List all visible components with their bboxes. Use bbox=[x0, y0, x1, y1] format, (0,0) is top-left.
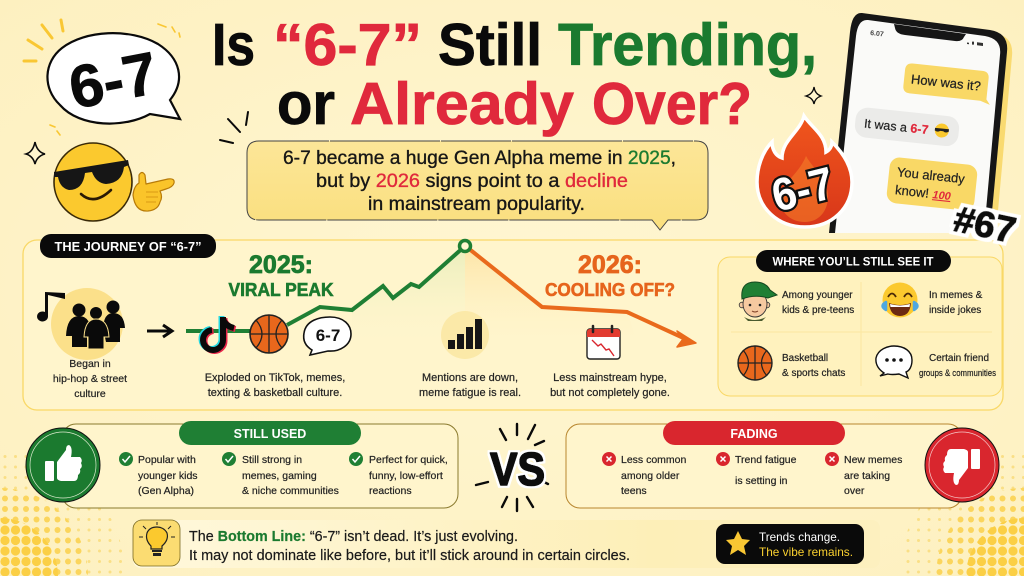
halftone dots bottom left bbox=[0, 455, 122, 576]
peak marker bbox=[460, 240, 470, 252]
chat bubble: how was it bbox=[902, 63, 993, 105]
bottom line text bbox=[189, 529, 630, 564]
text: friend groups bbox=[919, 353, 996, 378]
item: trend fatigue bbox=[716, 452, 797, 487]
icon: sparkle right bbox=[806, 87, 821, 104]
icon: basketball bbox=[250, 315, 288, 353]
caption: exploded bbox=[205, 372, 345, 399]
item: less common: among older bbox=[621, 470, 680, 482]
icon: flame 6-7 sticker: 6-7 bbox=[766, 156, 839, 222]
item: perfect: funny, low-effort bbox=[369, 470, 443, 482]
icon: sparkle left bbox=[26, 142, 45, 164]
icon: 6-7 speech bubble with rays: 6-7 bbox=[64, 39, 163, 122]
item: popular bbox=[119, 452, 198, 497]
item: less common: teens bbox=[621, 485, 647, 497]
heading 2026: 2026: bbox=[578, 251, 642, 279]
icon: thumbs up bbox=[26, 428, 100, 502]
text: basketball: Basketball bbox=[782, 353, 828, 364]
panel: fading bbox=[566, 421, 999, 508]
caption: mentions: Mentions are down, bbox=[422, 372, 518, 384]
icon: boy with cap bbox=[739, 282, 777, 321]
item: new memes: New memes bbox=[844, 454, 902, 466]
item: less common bbox=[602, 452, 687, 497]
item: still strong: memes, gaming bbox=[242, 470, 317, 482]
subtitle callout: 6-7 became a huge Gen Alpha meme in 2025, bbox=[283, 147, 676, 169]
still used pill bbox=[179, 421, 361, 445]
item: popular: Popular with bbox=[138, 454, 196, 466]
badge: trends change bbox=[716, 524, 864, 564]
title: Over? bbox=[592, 71, 752, 137]
chat bubble: it was a 6-7 bbox=[854, 107, 960, 147]
chat bubble: how was it: How was it? bbox=[910, 71, 982, 94]
text: friend groups: groups & communities bbox=[919, 368, 996, 378]
arrow: began to exploded bbox=[147, 325, 172, 337]
icon: flame 6-7 sticker bbox=[757, 116, 852, 227]
caption: began: Began in bbox=[69, 358, 111, 370]
orange falling arrow bbox=[468, 248, 696, 347]
chat bubble: you already know: know! 100 bbox=[894, 182, 952, 203]
item: new memes: over bbox=[844, 485, 865, 497]
VS badge: VS bbox=[490, 443, 545, 495]
text: friend groups: Certain friend bbox=[929, 353, 989, 364]
icon: light bulb bbox=[133, 520, 180, 566]
subtitle callout: in mainstream popularity. bbox=[368, 193, 585, 215]
heading 2025: VIRAL PEAK bbox=[228, 280, 334, 300]
item: new memes bbox=[825, 452, 902, 497]
caption: mentions bbox=[419, 372, 521, 399]
journey panel bbox=[23, 234, 1003, 410]
heading 2025 bbox=[228, 251, 334, 300]
fading pill: FADING bbox=[730, 427, 778, 441]
badge: trends change: Trends change. bbox=[759, 530, 840, 544]
title: Is bbox=[212, 12, 255, 78]
heading pill bbox=[756, 250, 951, 272]
icon: thumbs down bbox=[925, 428, 999, 502]
item: still strong: & niche communities bbox=[242, 485, 339, 497]
fading pill bbox=[663, 421, 845, 445]
icon: chat dots bubble bbox=[876, 346, 912, 378]
icon: 6-7 small bubble bbox=[304, 317, 351, 355]
text: memes: In memes & bbox=[929, 290, 983, 301]
bottom line banner bbox=[133, 520, 880, 568]
title: Still bbox=[438, 12, 542, 78]
status bar bbox=[870, 30, 983, 46]
heading pill: WHERE YOU’LL STILL SEE IT bbox=[772, 254, 934, 268]
item: popular: (Gen Alpha) bbox=[138, 485, 194, 497]
subtitle callout: but by 2026 signs point to a decline bbox=[316, 170, 628, 192]
title: or bbox=[277, 71, 335, 137]
chat bubble: you already know: You already bbox=[896, 164, 966, 186]
text: memes bbox=[929, 290, 983, 316]
icon: mentions bars bbox=[441, 311, 489, 359]
item: still strong bbox=[222, 452, 339, 497]
heading 2026 bbox=[545, 251, 675, 300]
icon: music and people bbox=[37, 288, 125, 360]
caption: mentions: meme fatigue is real. bbox=[419, 387, 521, 399]
text: basketball: & sports chats bbox=[782, 368, 845, 379]
text: younger kids: kids & pre-teens bbox=[782, 305, 854, 316]
panel: where you'll still see it bbox=[718, 250, 1002, 396]
title: Already bbox=[350, 71, 574, 137]
icon: basketball bbox=[738, 346, 772, 380]
caption: exploded: Exploded on TikTok, memes, bbox=[205, 372, 345, 384]
text: memes: inside jokes bbox=[929, 305, 981, 316]
caption: began: culture bbox=[74, 388, 106, 400]
trend shading bbox=[352, 246, 465, 350]
bottom line text: The Bottom Line: “6-7” isn’t dead. It’s just evolving. bbox=[189, 529, 518, 545]
text: younger kids: Among younger bbox=[782, 290, 853, 301]
item: trend fatigue: Trend fatigue bbox=[735, 454, 797, 466]
halftone dots bottom right bbox=[906, 455, 1024, 576]
subtitle callout bbox=[220, 112, 708, 230]
icon: tiktok logo bbox=[202, 316, 236, 351]
item: perfect: Perfect for quick, bbox=[369, 454, 448, 466]
still used pill: STILL USED bbox=[234, 427, 306, 441]
icon: laughing emoji bbox=[882, 282, 918, 318]
text: younger kids bbox=[782, 290, 854, 316]
item: perfect bbox=[349, 452, 448, 497]
chat bubble: it was a 6-7: It was a 6-7 bbox=[863, 116, 929, 137]
text: basketball bbox=[782, 353, 845, 379]
item: perfect: reactions bbox=[369, 485, 412, 497]
title: Trending, bbox=[558, 12, 817, 78]
chat bubble: you already know bbox=[886, 157, 978, 211]
caption: less hype: Less mainstream hype, bbox=[553, 372, 667, 384]
heading 2026: COOLING OFF? bbox=[545, 280, 675, 300]
green rising line bbox=[186, 246, 465, 331]
item: still strong: Still strong in bbox=[242, 454, 302, 466]
caption: exploded: texting & basketball culture. bbox=[208, 387, 342, 399]
status bar: 6.07 bbox=[870, 30, 884, 38]
caption: less hype: but not completely gone. bbox=[550, 387, 670, 399]
journey heading pill bbox=[40, 234, 216, 258]
icon: calendar decline bbox=[587, 326, 620, 359]
icon: 6-7 speech bubble with rays bbox=[24, 20, 180, 135]
item: new memes: are taking bbox=[844, 470, 890, 482]
icon: sunglasses emoji pointing bbox=[54, 143, 174, 221]
VS badge bbox=[476, 424, 548, 511]
item: less common: Less common bbox=[621, 454, 687, 466]
title bbox=[212, 12, 817, 137]
caption: less hype bbox=[550, 372, 670, 399]
caption: began bbox=[53, 358, 127, 400]
bottom line text: It may not dominate like before, but it’ll stick around in certain circles. bbox=[189, 548, 630, 564]
panel: still used bbox=[26, 421, 458, 508]
icon: 6-7 small bubble: 6-7 bbox=[316, 326, 340, 345]
title: “6-7” bbox=[273, 12, 422, 78]
item: trend fatigue: is setting in bbox=[735, 475, 788, 487]
badge: trends change: The vibe remains. bbox=[759, 545, 853, 559]
caption: began: hip-hop & street bbox=[53, 373, 127, 385]
phone with chat bbox=[829, 13, 1012, 233]
journey heading pill: THE JOURNEY OF “6-7” bbox=[54, 239, 202, 254]
heading 2025: 2025: bbox=[249, 251, 313, 279]
#67 sticker: #67 bbox=[950, 198, 1019, 251]
item: popular: younger kids bbox=[138, 470, 198, 482]
